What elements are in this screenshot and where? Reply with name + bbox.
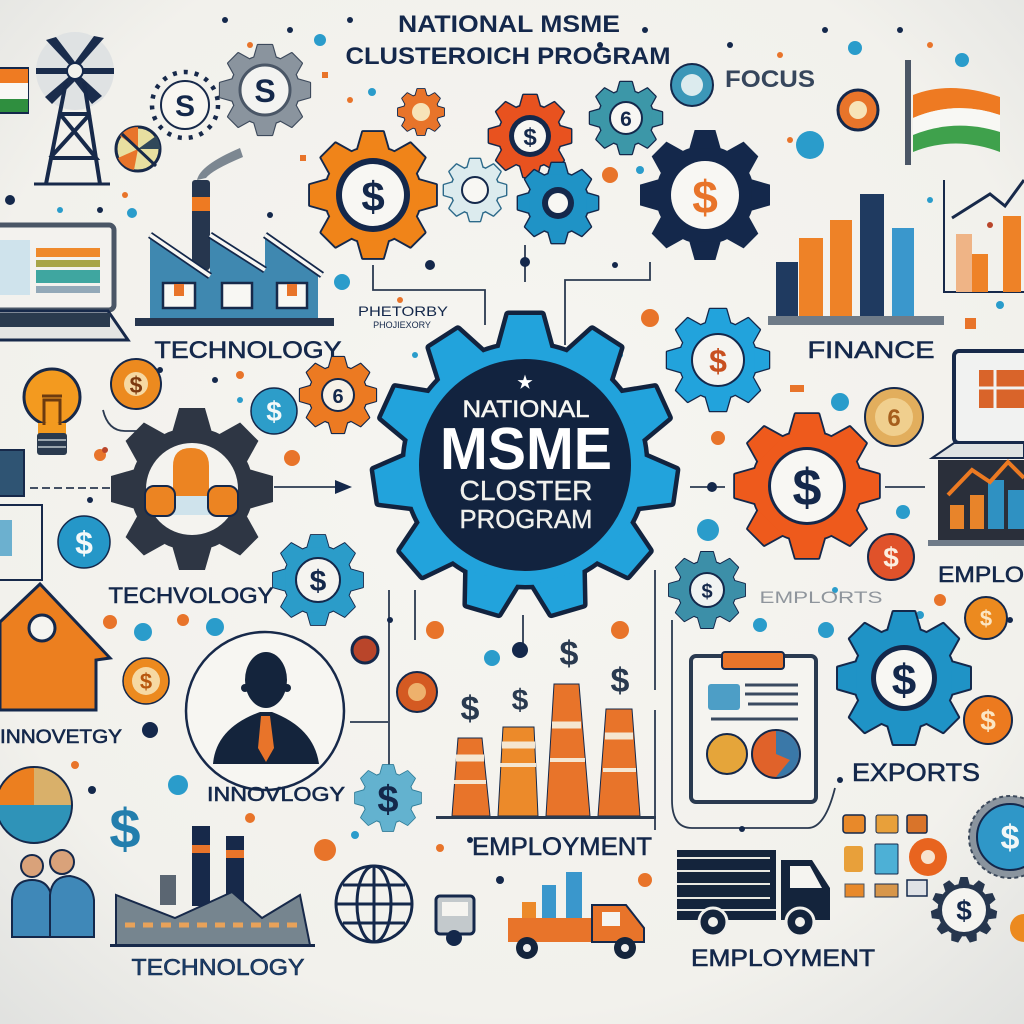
gear: small white teal xyxy=(444,159,506,221)
coin: blue xyxy=(251,388,297,434)
gear: blue right of center xyxy=(667,309,769,411)
dollar signs: $ xyxy=(109,797,141,860)
icon: two people xyxy=(12,850,94,937)
label: focus: FOCUS xyxy=(725,66,815,93)
label: emplorts: EMPLORTS xyxy=(760,588,882,607)
icon: factory bottom xyxy=(110,826,315,947)
icon: dark delivery truck xyxy=(677,850,830,936)
label: techvology: TECHVOLOGY xyxy=(108,583,274,608)
icon: dotted gear dollar: S xyxy=(175,90,195,123)
gear: orange right: $ xyxy=(793,459,822,517)
small icon grid xyxy=(843,815,947,897)
gear: dark bottom right: $ xyxy=(956,895,972,926)
icon: orange gear badge xyxy=(838,90,878,130)
label: photordy: PHOJIEXORY xyxy=(373,320,431,330)
icon: teal badge xyxy=(671,64,713,106)
coin: orange left xyxy=(111,359,161,409)
gear: dark with orange figures xyxy=(111,408,273,570)
icon: small orange gear xyxy=(398,89,444,135)
gear: blue left xyxy=(273,535,363,625)
central gear text: CLOSTER xyxy=(460,475,592,506)
gear: dark with orange dollar: $ xyxy=(692,171,718,223)
gear: blue lower right xyxy=(838,612,970,744)
label: photordy xyxy=(358,303,449,330)
coins: orange right edge xyxy=(964,597,1012,744)
coin: blue right edge with ring xyxy=(969,796,1024,878)
label: employ clipped: EMPLO xyxy=(938,562,1024,587)
label: innovology: INNOVLOGY xyxy=(207,784,345,806)
icon: india flag left xyxy=(0,67,29,114)
icon: house xyxy=(0,584,110,710)
icon: orange truck with bars xyxy=(508,872,644,959)
arrow: gear to center xyxy=(335,480,352,494)
icon: india flag on pole xyxy=(905,60,1000,165)
gear: blue lower right: $ xyxy=(892,656,916,705)
coin: blue left xyxy=(58,516,110,568)
icon: small truck xyxy=(436,896,474,946)
label: exports: EXPORTS xyxy=(852,759,980,787)
icon: laptop right with chart xyxy=(928,351,1024,546)
gear: orange small: 6 xyxy=(332,386,344,408)
title xyxy=(346,11,670,70)
central gear text xyxy=(440,373,612,534)
icon: gray gear xyxy=(220,45,310,135)
gear: orange and dark top center xyxy=(489,95,571,177)
coin: tan xyxy=(865,388,923,446)
coin: red right xyxy=(868,534,914,580)
gear: orange right xyxy=(735,414,879,558)
central gear text: NATIONAL xyxy=(462,396,590,423)
dollar signs xyxy=(109,635,630,860)
gear: dark with orange dollar xyxy=(640,130,770,260)
gear: blue right of center: $ xyxy=(709,343,727,379)
coin: tan: 6 xyxy=(887,405,901,432)
gear: orange and dark top center: $ xyxy=(523,124,537,151)
gear: light blue bottom: $ xyxy=(377,779,399,821)
gear: teal top xyxy=(590,82,662,154)
gear: blue left: $ xyxy=(310,565,327,598)
gear: teal top: 6 xyxy=(620,108,632,131)
icon: gray gear: S xyxy=(254,73,276,109)
label: photordy: PHETORBY xyxy=(358,303,449,319)
coins: orange right edge: $ xyxy=(980,606,992,631)
dollar signs: $ xyxy=(512,684,529,717)
coin: red right: $ xyxy=(883,542,899,573)
icon: wind turbine tower xyxy=(34,32,114,184)
icon: dotted gear dollar xyxy=(152,72,218,138)
gear: orange top xyxy=(310,132,436,258)
coin: blue left: $ xyxy=(75,525,93,561)
icon: orange chimneys xyxy=(436,684,656,819)
dollar signs: $ xyxy=(611,662,630,700)
coin: orange left: $ xyxy=(130,372,143,398)
title: NATIONAL MSME xyxy=(398,11,620,38)
label: technology bottom: TECHNOLOGY xyxy=(132,954,304,980)
label: technology: TECHNOLOGY xyxy=(154,337,342,364)
gear: light blue bottom xyxy=(355,765,421,831)
icon: left-edge machine xyxy=(0,450,42,580)
icon: factory top xyxy=(135,148,334,326)
gear: teal below center right xyxy=(669,552,745,628)
icon: pie chart top left xyxy=(116,127,160,171)
coin: dark red xyxy=(397,672,437,712)
coin: orange lower left: $ xyxy=(140,669,152,694)
central gear xyxy=(373,315,677,616)
icon: clipboard xyxy=(691,652,816,802)
icon: light bulb xyxy=(24,369,80,455)
title: CLUSTEROICH PROGRAM xyxy=(346,43,670,70)
gear: orange top: $ xyxy=(361,173,385,220)
gear: orange small xyxy=(300,357,376,433)
connector lines xyxy=(30,245,925,830)
gear: dark bottom right xyxy=(931,877,997,943)
label: employment center: EMPLOYMENT xyxy=(472,833,652,861)
gear: teal below center right: $ xyxy=(701,581,713,603)
central gear text: ★ xyxy=(517,373,533,392)
icon: laptop left xyxy=(0,225,128,340)
gear: blue top center xyxy=(518,163,598,243)
label: employment bottom: EMPLOYMENT xyxy=(691,945,875,972)
coin: orange lower left xyxy=(123,658,169,704)
central gear text: PROGRAM xyxy=(460,504,592,534)
coin: orange bottom right edge xyxy=(1010,914,1024,942)
icon: person in circle xyxy=(186,632,344,790)
icon: pie chart lower left xyxy=(0,767,72,843)
dollar signs: $ xyxy=(461,690,480,728)
label: finance: FINANCE xyxy=(808,337,934,364)
bar chart top right xyxy=(768,194,944,325)
coins: orange right edge: $ xyxy=(980,705,996,736)
dollar signs: $ xyxy=(560,635,579,673)
central gear text: MSME xyxy=(440,416,612,482)
icon: globe xyxy=(336,866,412,942)
coin: blue right edge with ring: $ xyxy=(1001,819,1020,857)
line and bar chart right edge xyxy=(944,180,1024,292)
coin: blue: $ xyxy=(266,396,282,427)
label: innovetgy: INNOVETGY xyxy=(0,727,122,748)
